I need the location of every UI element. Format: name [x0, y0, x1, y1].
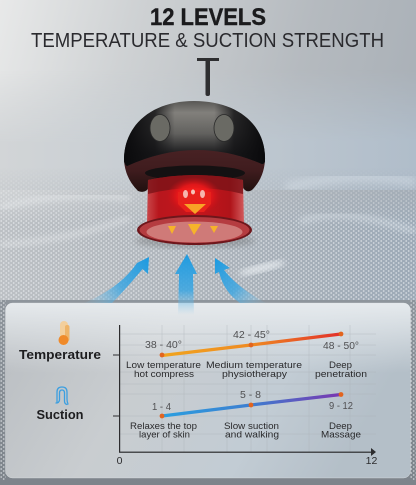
title: 12 LEVELS: [150, 4, 266, 31]
chart grid: [120, 325, 376, 452]
temperature values: 38 - 40°: [145, 340, 182, 351]
device black dome: [124, 101, 265, 166]
temperature values: 42 - 45°: [233, 330, 270, 341]
temperature values: 48 - 50°: [323, 341, 359, 352]
temperature icon: [58, 321, 70, 345]
icon: T temperature marker: [197, 58, 219, 96]
suction line: [160, 392, 343, 418]
suction descriptions: and walking: [225, 430, 279, 440]
temperature values: [145, 330, 359, 352]
device flange: [137, 215, 252, 245]
device dome buttons: [150, 114, 170, 142]
suction descriptions: layer of skin: [139, 430, 190, 440]
device collar: [145, 166, 245, 180]
temperature label: Temperature: [19, 348, 101, 362]
device LEDs: [168, 224, 218, 235]
arrow right: [215, 258, 266, 303]
suction descriptions: Massage: [321, 430, 361, 440]
suction values: 5 - 8: [240, 390, 261, 401]
arrow center: [175, 254, 197, 315]
temperature descriptions: physiotherapy: [222, 369, 288, 379]
arrows: suction airflow: [84, 254, 266, 315]
device shadow: [135, 234, 255, 248]
temperature descriptions: Low temperature: [126, 360, 201, 370]
device brim underside: [124, 145, 265, 192]
subtitle: TEMPERATURE & SUCTION STRENGTH: [31, 30, 384, 52]
suction values: 1 - 4: [152, 402, 171, 413]
arrow left: [84, 257, 149, 303]
temperature descriptions: penetration: [315, 369, 367, 379]
temperature line: [160, 332, 343, 357]
chart axes: [113, 325, 376, 456]
temperature descriptions: hot compress: [134, 369, 195, 379]
device glow: [167, 177, 221, 215]
device: cupping massager: [124, 101, 265, 248]
suction descriptions: Relaxes the top: [130, 421, 197, 431]
suction values: 9 - 12: [329, 401, 353, 412]
temperature descriptions: [126, 360, 367, 379]
suction icon: [56, 387, 68, 404]
suction descriptions: Deep: [329, 421, 352, 431]
axis label twelve: 12: [366, 455, 377, 467]
panel: chart card: [6, 303, 410, 478]
temperature descriptions: Deep: [329, 360, 352, 370]
axis label zero: 0: [117, 455, 123, 467]
suction descriptions: Slow suction: [224, 421, 279, 431]
device red cup body: [147, 175, 244, 232]
suction label: Suction: [36, 408, 84, 422]
suction values: [152, 390, 353, 413]
temperature descriptions: Medium temperature: [206, 360, 302, 370]
suction descriptions: [130, 421, 361, 440]
